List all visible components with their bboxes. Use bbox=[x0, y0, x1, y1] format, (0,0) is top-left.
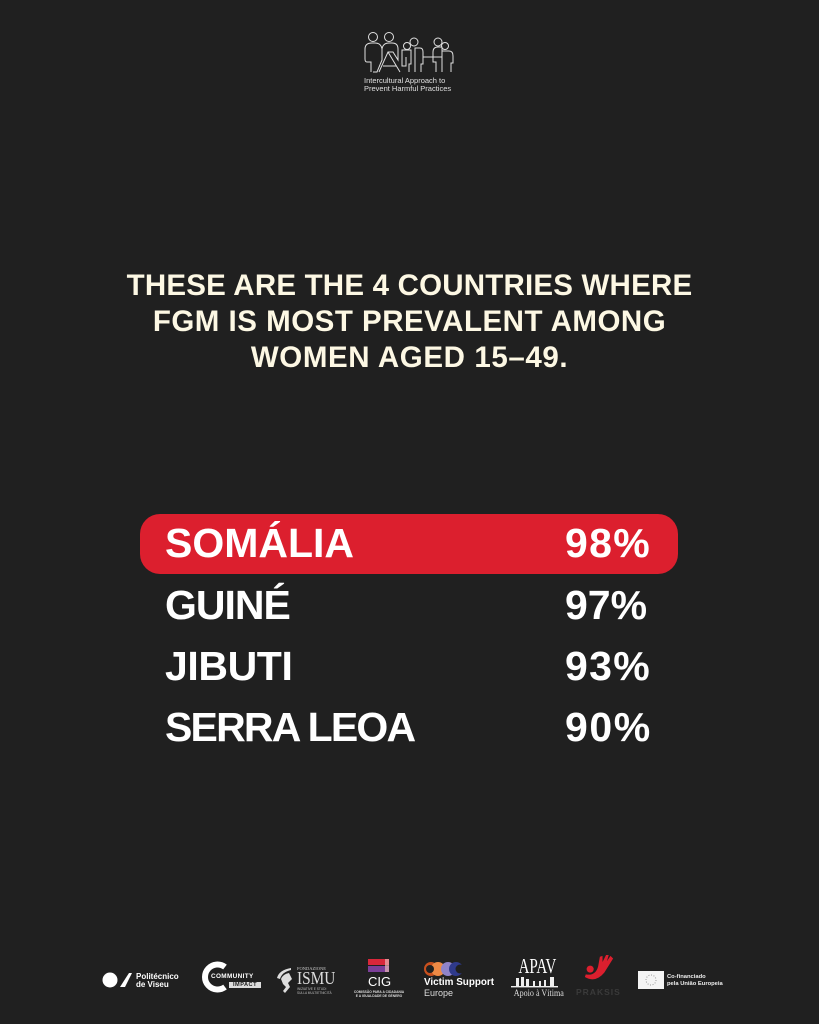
logo: Politécnico de Viseu bbox=[102, 972, 179, 989]
text: Politécnico de Viseu: de Viseu bbox=[136, 980, 169, 989]
row: Somália value: 98% bbox=[565, 520, 651, 566]
text: Fondazione: FONDAZIONE bbox=[297, 966, 326, 971]
row: Jibuti value: 93% bbox=[565, 643, 651, 689]
logo caption bbox=[364, 76, 451, 93]
text: Apoio à Vítima: Apoio à Vítima bbox=[514, 989, 564, 999]
highlight bar: Somália bbox=[140, 514, 678, 574]
row: Somália name: SOMÁLIA bbox=[165, 520, 354, 566]
icon: stylised head bbox=[277, 968, 292, 993]
text: CIG full name: COMISSÃO PARA A CIDADANIA bbox=[354, 990, 404, 994]
text: Politécnico de Viseu: Politécnico bbox=[136, 972, 179, 980]
logo: Community Impact bbox=[202, 962, 261, 992]
row: Serra Leoa value: 90% bbox=[565, 704, 652, 750]
row: Guiné name: GUINÉ bbox=[165, 582, 290, 628]
logo: CIG bbox=[354, 959, 404, 998]
text: Community: COMMUNITY bbox=[211, 973, 254, 980]
text: CIG full name: E A IGUALDADE DE GÉNERO bbox=[356, 994, 402, 998]
logo icon: outlined figures bbox=[364, 32, 454, 72]
icon: large C bbox=[202, 962, 227, 992]
logo: Intercultural Approach to Prevent Harmful Practices bbox=[364, 32, 454, 93]
text: ISMU tagline: SULLA MULTIETNICITÀ bbox=[297, 991, 332, 995]
logo: APAV bbox=[511, 954, 564, 999]
heading: FGM IS MOST PREVALENT AMONG bbox=[153, 305, 666, 338]
logo: Victim Support Europe bbox=[424, 962, 494, 998]
logo: Fondazione ISMU bbox=[277, 966, 335, 995]
icon: red hand bbox=[584, 955, 613, 980]
text: APAV: APAV bbox=[518, 954, 556, 978]
logo: Praksis bbox=[576, 955, 621, 997]
text: CIG: CIG bbox=[368, 974, 391, 989]
text: ISMU tagline: INIZIATIVE E STUDI bbox=[297, 987, 326, 991]
text: Victim Support: Victim Support bbox=[424, 977, 494, 988]
heading bbox=[126, 269, 692, 374]
text: ISMU: ISMU bbox=[297, 968, 335, 988]
text: Politécnico de Viseu bbox=[136, 972, 179, 989]
icon: people silhouettes bbox=[511, 977, 558, 988]
heading: WOMEN AGED 15–49. bbox=[251, 341, 568, 374]
row: Serra Leoa name: SERRA LEOA bbox=[165, 704, 414, 750]
logo: Co-financiado pela União Europeia bbox=[638, 971, 723, 989]
text: Co-financiado pela União Europeia bbox=[667, 974, 723, 987]
row: Guiné value: 97% bbox=[565, 582, 647, 628]
icon: overlapping circles bbox=[424, 962, 462, 976]
logo caption: Intercultural Approach to bbox=[364, 76, 445, 85]
text: Impact: IMPACT bbox=[233, 982, 257, 988]
text: CIG full name bbox=[354, 990, 404, 998]
text: ISMU tagline bbox=[297, 987, 332, 995]
row: Jibuti name: JIBUTI bbox=[165, 643, 292, 689]
text: Co-financiado pela União Europeia: pela União Europeia bbox=[667, 981, 723, 987]
icon: circle and slash bbox=[102, 972, 132, 988]
logo caption: Prevent Harmful Practices bbox=[364, 84, 451, 93]
icon: EU flag bbox=[638, 971, 664, 989]
text: Europe: Europe bbox=[424, 988, 453, 998]
text: Praksis: PRAKSIS bbox=[576, 987, 621, 997]
heading: THESE ARE THE 4 COUNTRIES WHERE bbox=[127, 269, 692, 302]
icon: red and purple bars bbox=[368, 959, 389, 972]
text: Co-financiado pela União Europeia: Co-financiado bbox=[667, 974, 706, 980]
